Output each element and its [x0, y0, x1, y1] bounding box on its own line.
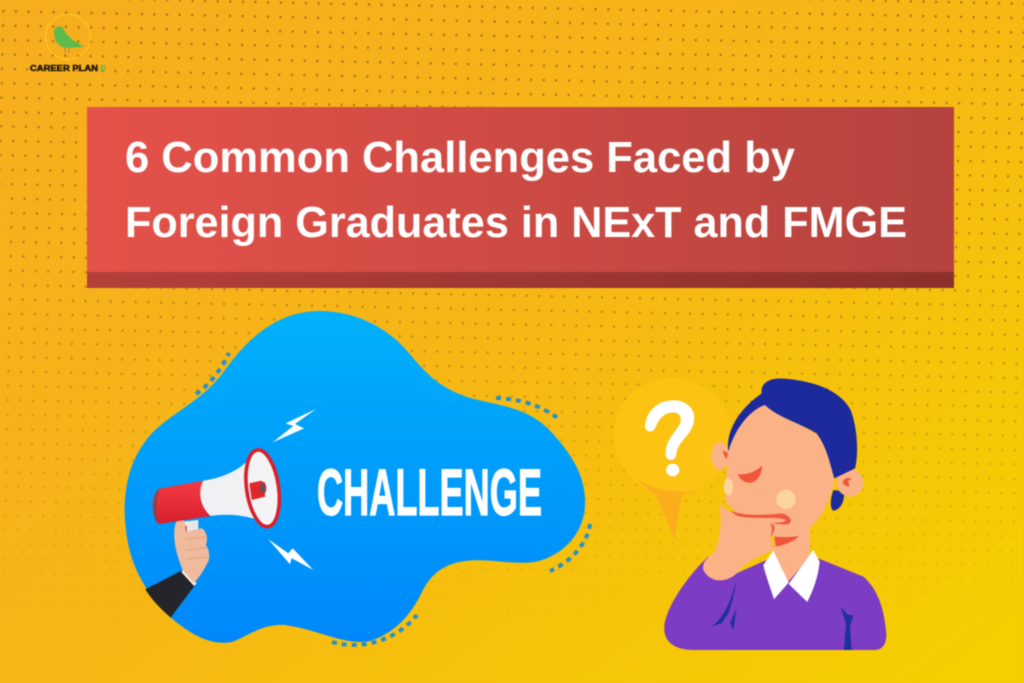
- question mark: [645, 400, 694, 476]
- handle: [182, 520, 198, 535]
- horn red body: [153, 481, 211, 524]
- hand: [703, 503, 776, 580]
- horn white cone: [200, 462, 258, 520]
- title: Foreign Graduates in NExT and FMGE: [125, 198, 907, 247]
- neck: [773, 527, 810, 582]
- cheeks: [776, 490, 796, 509]
- sweater folds: [712, 577, 853, 650]
- title: 6 Common Challenges Faced by: [125, 133, 796, 182]
- blue blob: Challenge: [125, 311, 590, 645]
- hand: [174, 519, 209, 583]
- logo: Career Plan B: B: [100, 63, 106, 73]
- man thinking: [664, 378, 886, 650]
- logo: Career Plan B: CAREER PLAN: [30, 63, 98, 73]
- ears: [711, 442, 729, 470]
- sweater: [664, 557, 886, 650]
- face: [725, 403, 835, 537]
- sleeve: [145, 570, 195, 618]
- bell: [241, 448, 284, 529]
- title banner: [87, 107, 954, 288]
- icon: question mark bubble: [614, 378, 732, 540]
- back hair: [831, 490, 844, 511]
- dashed accents: [196, 353, 590, 645]
- logo: Career Plan B: [30, 14, 106, 73]
- mouth and finger line: [731, 511, 799, 547]
- title: [125, 133, 907, 247]
- lightning bolts: [273, 409, 316, 442]
- closed eye: [738, 465, 762, 483]
- hair: [728, 378, 857, 478]
- heading: CHALLENGE: CHALLENGE: [317, 455, 542, 529]
- collar: [763, 551, 789, 599]
- icon: megaphone with hand: [145, 409, 316, 618]
